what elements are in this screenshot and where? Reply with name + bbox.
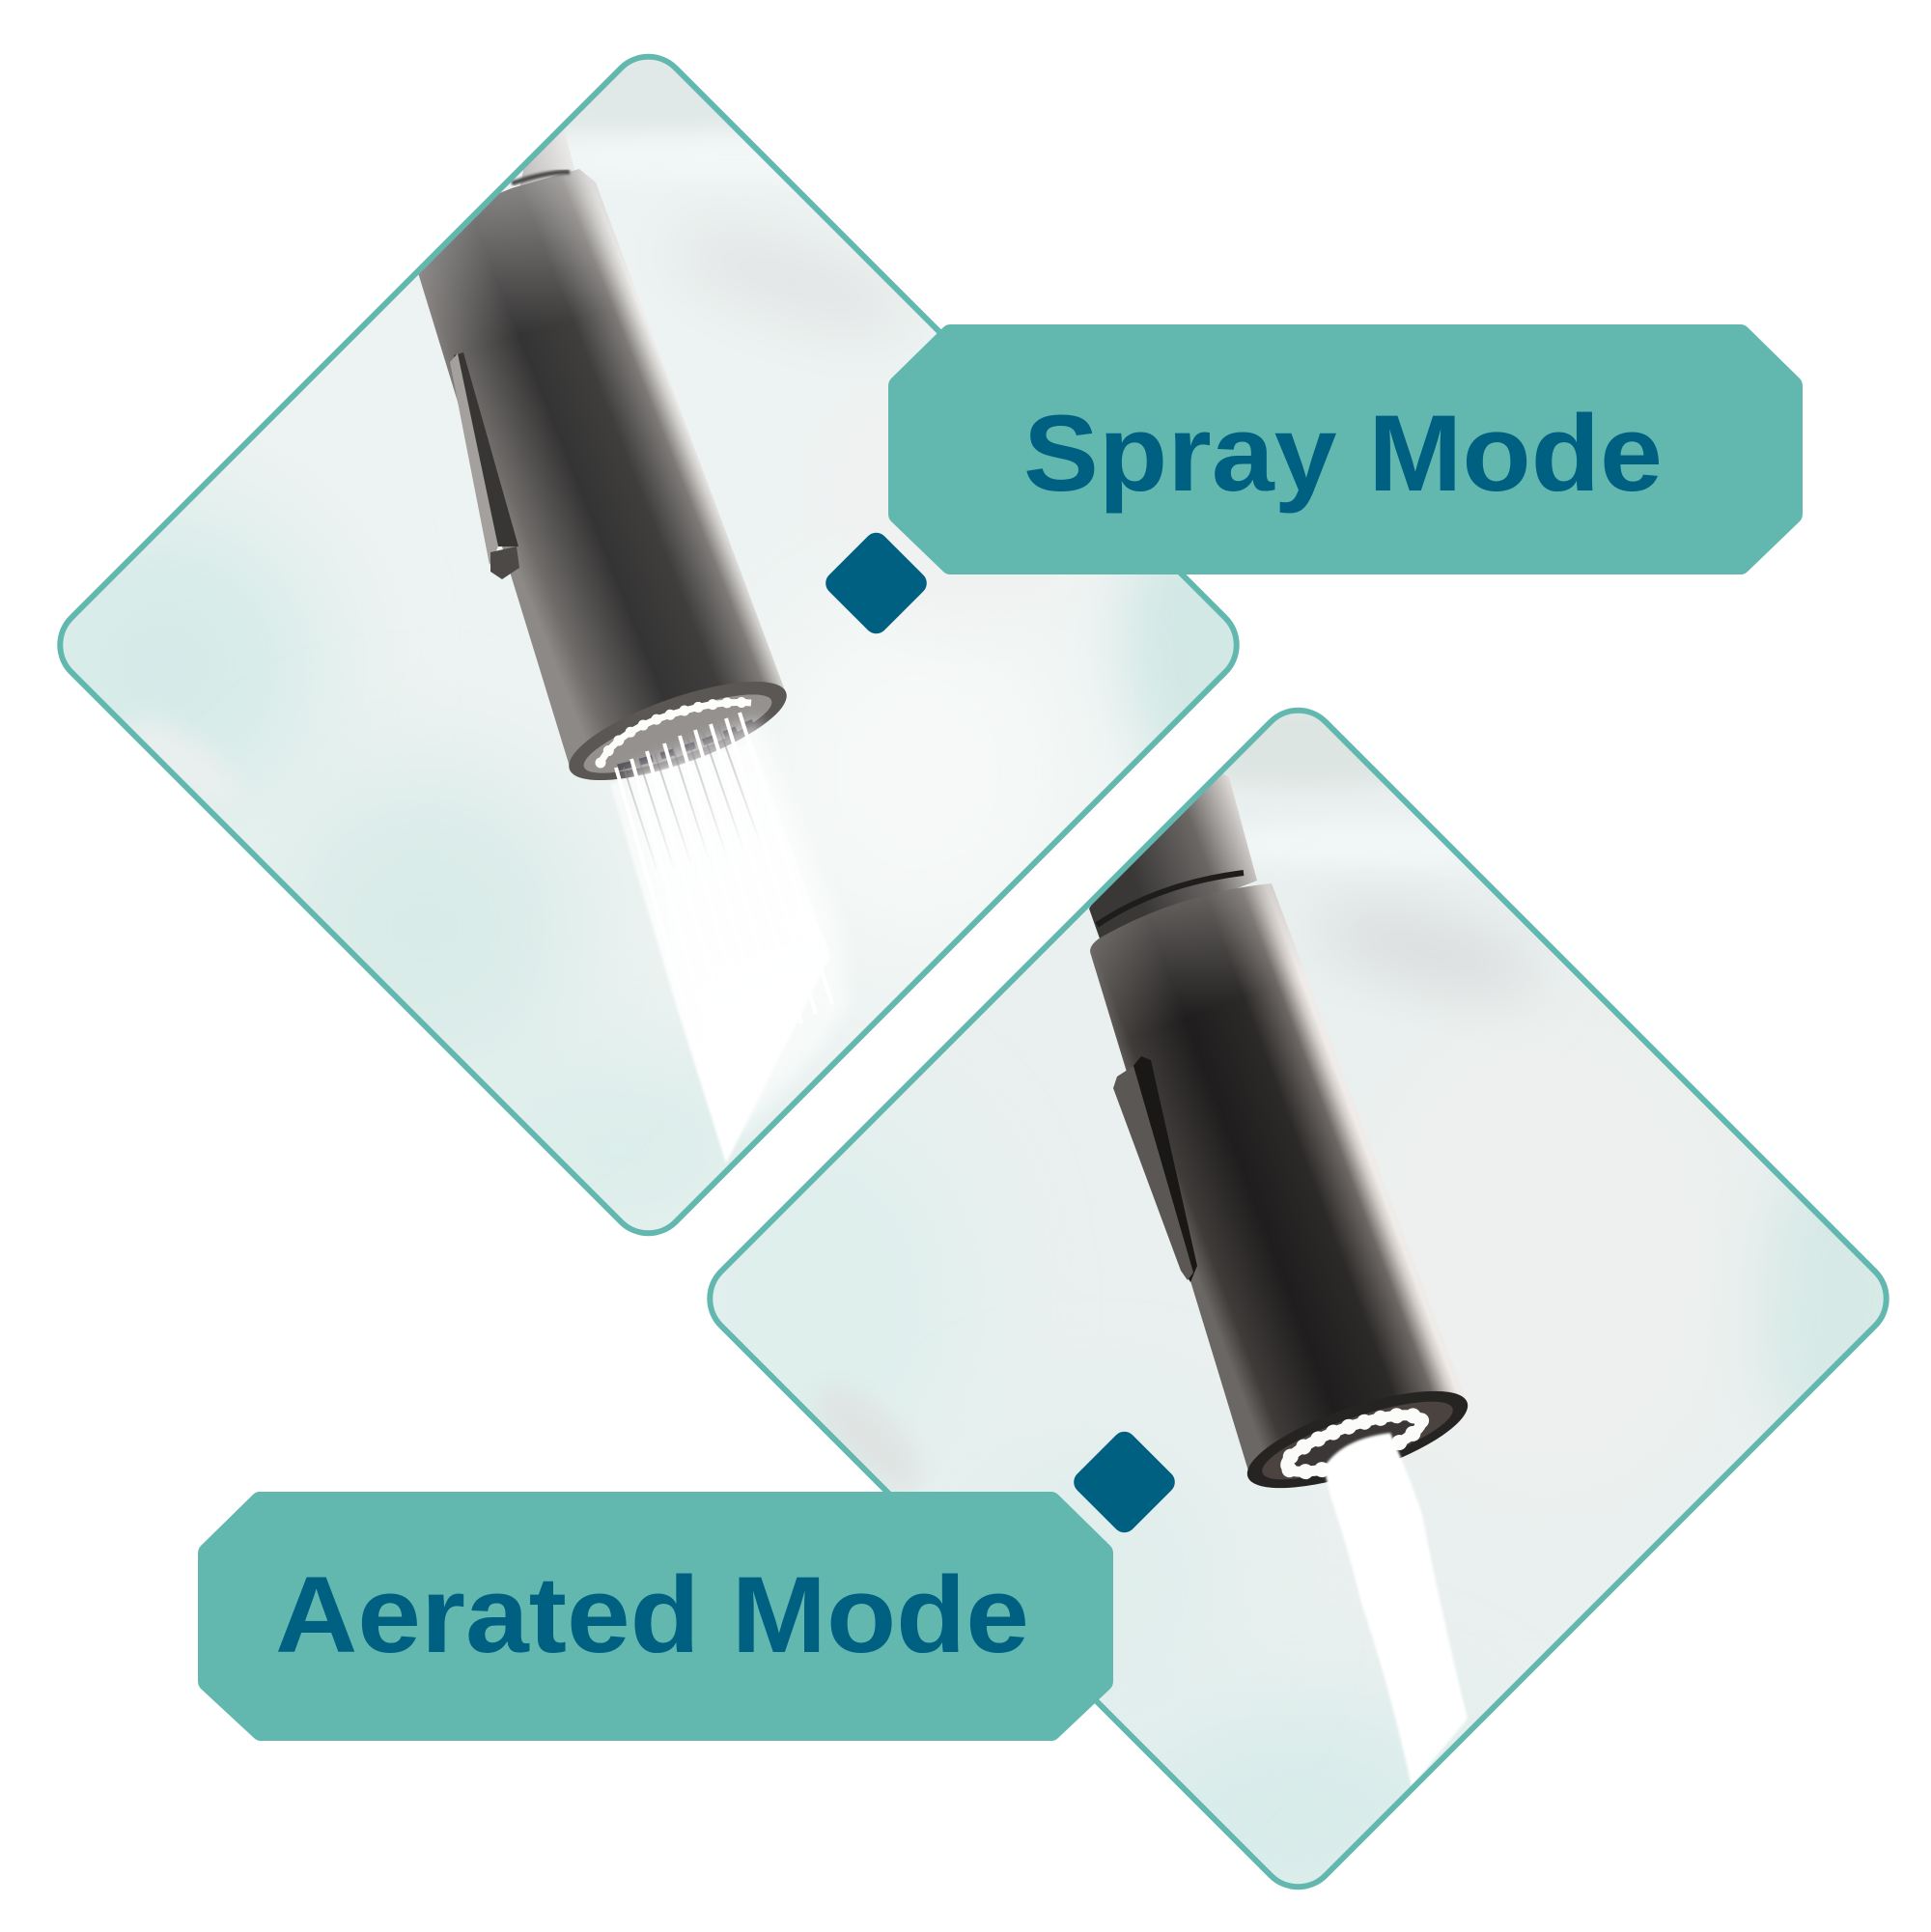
marker diamond: aerated mode [1069, 1427, 1180, 1537]
label text: Aerated Mode [275, 1554, 1029, 1675]
lever [450, 352, 519, 579]
nozzle [569, 682, 787, 780]
panel border [694, 694, 1902, 1903]
panel: spray mode photo [57, 54, 1240, 1236]
photo background [713, 713, 1884, 1885]
lever [1113, 1056, 1197, 1282]
panel: aerated mode photo [707, 707, 1889, 1890]
water stream [1324, 1433, 1468, 1786]
faucet head: neck, body, lever and nozzle [1089, 753, 1478, 1508]
faucet head: neck, body, lever and nozzle [419, 132, 787, 780]
label: aerated mode [198, 1492, 1113, 1741]
nozzle [1247, 1390, 1468, 1489]
water spray [610, 713, 850, 1163]
marker diamond: spray mode [821, 528, 932, 638]
label: spray mode [888, 324, 1803, 574]
label text: Spray Mode [1023, 393, 1663, 514]
photo background [63, 60, 1234, 1230]
panel border [44, 41, 1252, 1249]
